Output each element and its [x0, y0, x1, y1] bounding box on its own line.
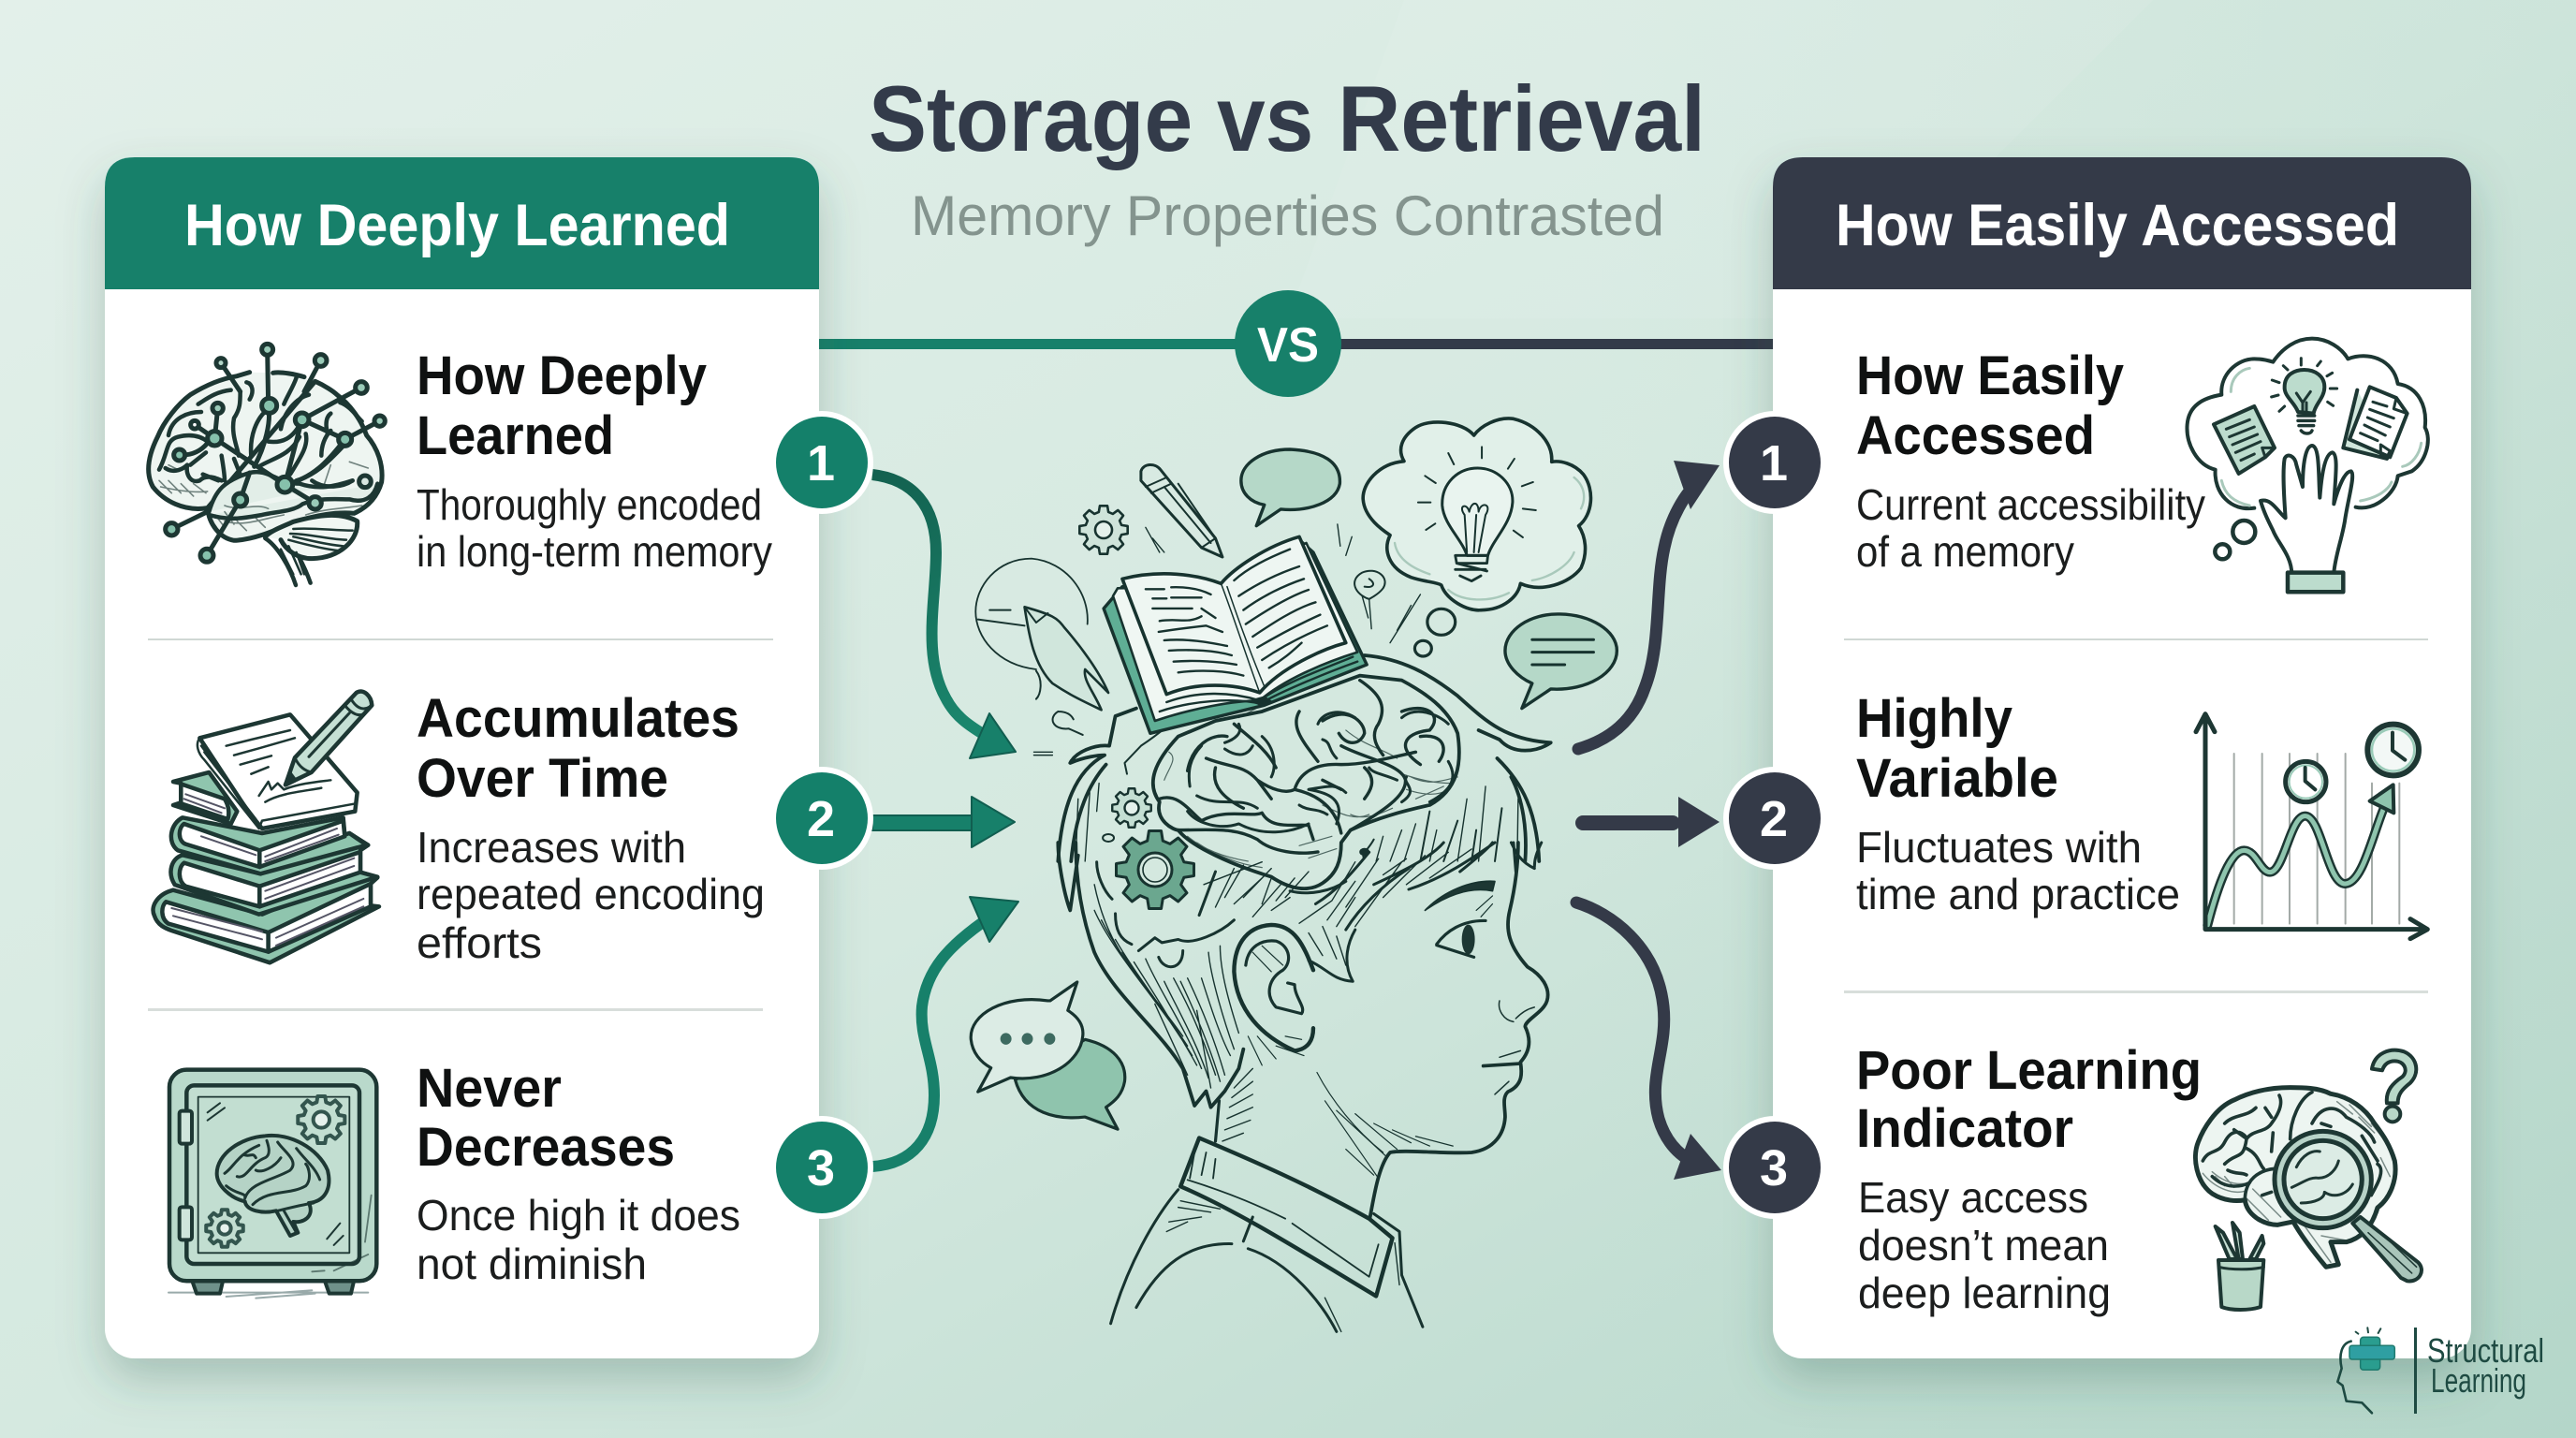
- brain body: [2195, 1088, 2395, 1267]
- arrow left 3: [872, 897, 1018, 1167]
- arrow left 1: [872, 475, 1016, 758]
- right item 3 text: deep learning: [1858, 1269, 2111, 1317]
- badge right 1: [1723, 411, 1826, 514]
- logo: structural learning: Learning: [2431, 1361, 2526, 1400]
- thought cloud with bulb: [1363, 418, 1590, 610]
- badge left 2: [770, 767, 873, 870]
- right item 2 text: Variable: [1856, 748, 2058, 809]
- magnifier: [2352, 1217, 2422, 1281]
- title: Storage vs Retrieval: [869, 66, 1705, 170]
- right item 3 text: Indicator: [1856, 1098, 2073, 1159]
- left item 1 text: Learned: [417, 405, 614, 466]
- right item 3 text: Easy access: [1858, 1173, 2088, 1222]
- left item 3 text: Never: [417, 1058, 562, 1119]
- left item 2 text: repeated encoding: [417, 870, 765, 918]
- left item 2 text: Over Time: [417, 748, 668, 809]
- left card header: How Deeply Learned: [184, 193, 730, 258]
- left card body: [105, 157, 819, 1358]
- arrow right 2: [1575, 797, 1720, 847]
- neck back: [1215, 1101, 1219, 1141]
- vs connector line: [814, 339, 1778, 349]
- left item 3 text: Decreases: [417, 1117, 675, 1178]
- cloud: [2188, 339, 2428, 508]
- badge left 2: 2: [807, 791, 835, 847]
- left item 1 text: [417, 345, 772, 576]
- right item 2 text: time and practice: [1856, 870, 2180, 918]
- left item 2 text: [417, 688, 765, 967]
- right item 3 text: [1856, 1040, 2202, 1317]
- rocket sketch: [975, 559, 1108, 735]
- left item 3 text: Once high it does: [417, 1191, 740, 1240]
- gear floating: [1079, 506, 1128, 554]
- badge right 3: [1723, 1116, 1826, 1219]
- left item 2 text: Increases with: [417, 823, 686, 872]
- logo: structural learning: [2337, 1328, 2544, 1414]
- face, neck and shoulders: [971, 843, 1548, 1331]
- central illustration: boy's head: [971, 418, 1617, 1331]
- arrow right 3: [1576, 902, 1721, 1180]
- nose and lip detail: [1495, 1001, 1534, 1094]
- right item 1 text: How Easily: [1856, 345, 2124, 406]
- badge left 1: 1: [807, 435, 835, 492]
- right item 2 text: [1856, 688, 2180, 918]
- vs badge: [1235, 290, 1341, 397]
- left item 3 text: [417, 1058, 740, 1288]
- left item 1 text: in long-term memory: [417, 527, 772, 576]
- right card body: [1773, 157, 2471, 1358]
- subtitle: Memory Properties Contrasted: [911, 184, 1664, 247]
- vs badge: VS: [1257, 318, 1319, 373]
- left item 1 text: How Deeply: [417, 345, 707, 406]
- left item 2 text: Accumulates: [417, 688, 739, 749]
- icon: safe with brain: [168, 1070, 376, 1299]
- speech bubble top: [1241, 449, 1339, 526]
- shoulders: [1111, 1190, 1423, 1331]
- ear: [1234, 925, 1313, 1065]
- icon: variability chart with clocks: [2196, 714, 2427, 939]
- pencil: [1141, 464, 1222, 557]
- badge left 3: [770, 1116, 873, 1219]
- eye: [1425, 881, 1495, 957]
- icon: networked brain: [149, 344, 385, 585]
- right item 3 text: doesn’t mean: [1858, 1221, 2109, 1269]
- hair hatch: [1094, 885, 1238, 1088]
- arrow left 2: [872, 797, 1015, 847]
- right item 1 text: [1856, 345, 2205, 576]
- right card header: [1773, 157, 2471, 289]
- right item 1 text: of a memory: [1856, 527, 2074, 576]
- right item 2 text: Fluctuates with: [1856, 823, 2142, 872]
- right card header: How Easily Accessed: [1836, 193, 2399, 258]
- arrow right 1: [1578, 461, 1720, 749]
- badge right 3: 3: [1760, 1140, 1788, 1196]
- collar: [1180, 1137, 1393, 1296]
- thought dots: [1414, 609, 1456, 656]
- badge right 2: [1723, 767, 1826, 870]
- left item 2 text: efforts: [417, 918, 542, 967]
- pencil cup: [2216, 1223, 2263, 1310]
- question mark: [2372, 1050, 2416, 1103]
- icon: brain with magnifier: [2195, 1050, 2422, 1310]
- speech bubble right: [1505, 614, 1617, 709]
- icon: book stack with pencil: [154, 692, 379, 962]
- neck shading: [1317, 1072, 1453, 1179]
- floating ideas and head top: [975, 418, 1617, 888]
- right item 1 text: Accessed: [1856, 405, 2095, 466]
- speech bubbles lower: [971, 982, 1125, 1129]
- brain in head: [1153, 676, 1459, 888]
- face profile: [1370, 843, 1548, 1217]
- hand: [2261, 446, 2352, 574]
- right item 1 text: Current accessibility: [1856, 480, 2205, 529]
- hair back outline: [1058, 843, 1243, 1108]
- left item 1 text: Thoroughly encoded: [417, 480, 762, 529]
- badge left 1: [770, 411, 873, 514]
- panel: how deeply learned: [105, 157, 819, 1358]
- mouth: [1484, 1064, 1518, 1066]
- right item 3 text: Poor Learning: [1856, 1040, 2202, 1101]
- left card header: [105, 157, 819, 289]
- logo mark: [2337, 1328, 2394, 1413]
- panel: how easily accessed: [1773, 157, 2471, 1358]
- badge right 2: 2: [1760, 791, 1788, 847]
- gear small in hair: [1112, 788, 1151, 828]
- gear large: [1117, 831, 1193, 908]
- hair top: [1058, 655, 1551, 861]
- right item 2 text: Highly: [1856, 688, 2012, 749]
- small marks: [1033, 524, 1420, 756]
- icon: thought cloud with hand: [2188, 339, 2428, 592]
- badge right 1: 1: [1760, 435, 1788, 492]
- left item 3 text: not diminish: [417, 1240, 647, 1288]
- badge left 3: 3: [807, 1140, 835, 1196]
- logo: structural learning: Structural: [2427, 1331, 2544, 1370]
- open book: [1104, 536, 1367, 733]
